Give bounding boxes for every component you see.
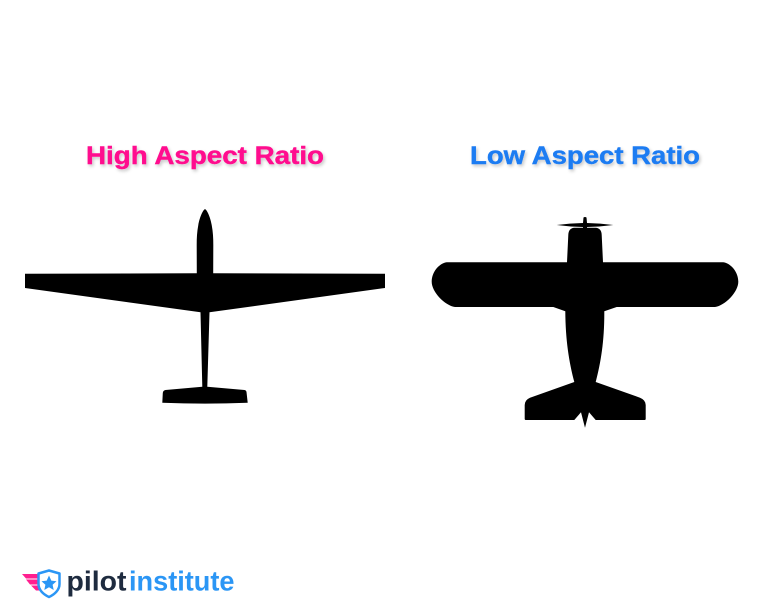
icon: pink wings	[22, 574, 43, 590]
fuselage and wings	[432, 228, 738, 428]
propeller	[557, 217, 613, 229]
heading: Low Aspect Ratio: Low Aspect Ratio	[470, 142, 700, 170]
icon: light aircraft silhouette, low aspect ratio wing	[432, 217, 738, 428]
wordmark: pilot: pilot	[66, 566, 126, 596]
icon: shield with star	[38, 570, 60, 597]
wordmark: institute: institute	[129, 566, 234, 596]
icon: glider silhouette, high aspect ratio wing	[25, 209, 385, 404]
heading: High Aspect Ratio: High Aspect Ratio	[86, 142, 324, 170]
logo: pilot institute	[22, 566, 234, 597]
